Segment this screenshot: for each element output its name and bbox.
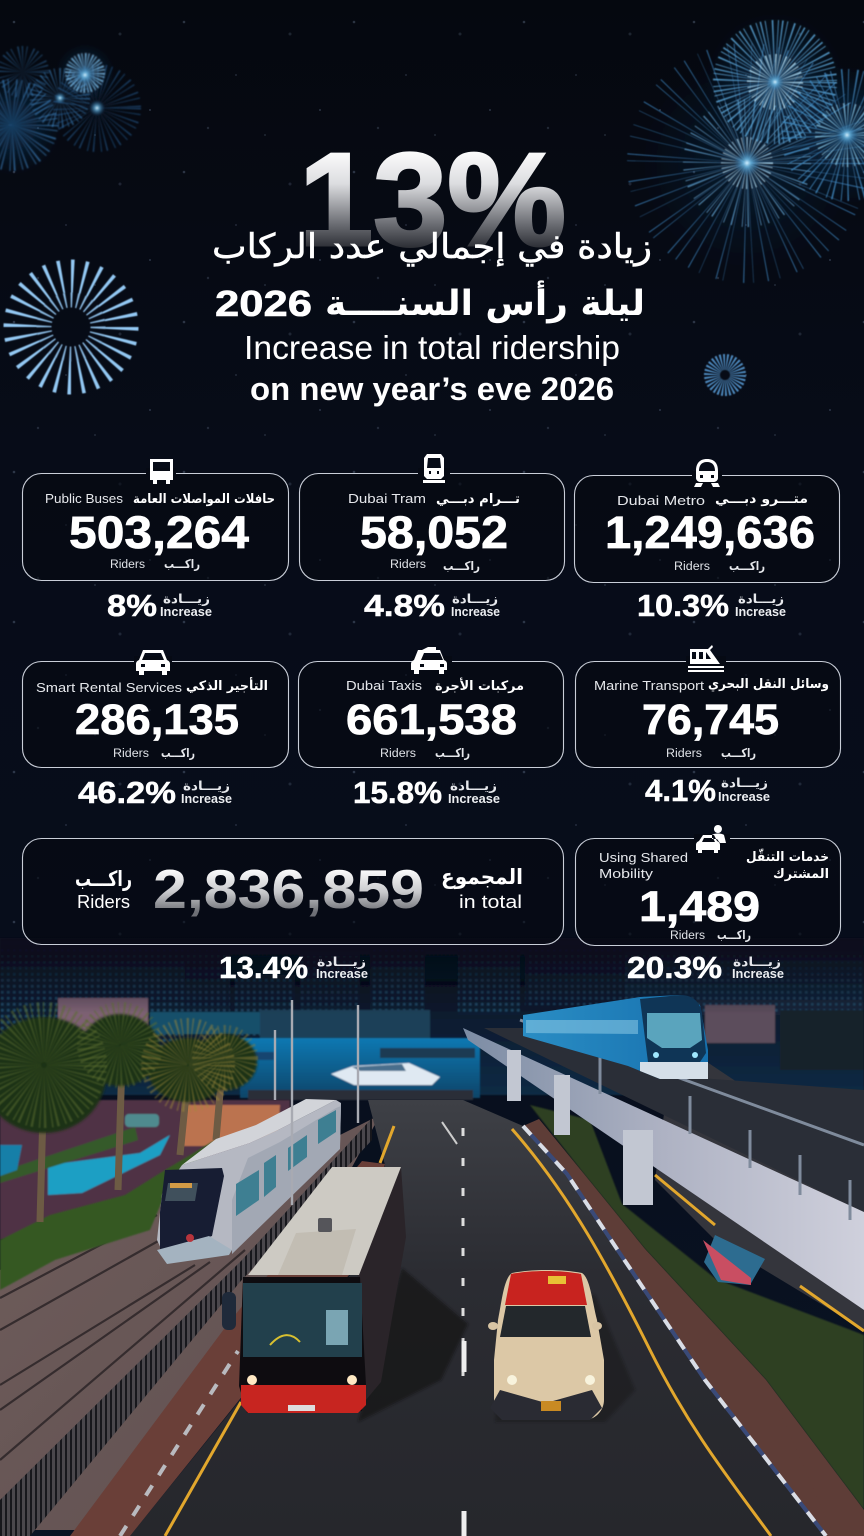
stat: smart rental increase: زيـــادة (183, 778, 230, 793)
panel: shared mobility (576, 825, 840, 946)
icon: bus (146, 459, 176, 484)
stat: marine increase (645, 773, 770, 808)
value: 286,135 (75, 696, 239, 744)
value: 503,264 (69, 507, 249, 558)
stat: taxis increase (353, 775, 500, 810)
label: Public Buses (45, 491, 124, 506)
panel: smart rental (22, 650, 288, 768)
label: Dubai Tram (348, 491, 426, 506)
riders: Riders (666, 748, 702, 760)
headline Arabic line 2: 2026 (215, 283, 312, 324)
panel: public buses: راكـــب (164, 557, 200, 571)
panel: dubai taxis: مركبات الأجرة (435, 677, 524, 694)
stat: total increase (219, 950, 368, 985)
stat: shared increase: Increase (732, 967, 784, 981)
panel: marine transport (576, 645, 840, 768)
stat: total increase: Increase (316, 967, 368, 981)
stat: buses increase (107, 588, 212, 623)
riders: Riders (390, 559, 426, 571)
label: Marine Transport (594, 678, 704, 693)
stat: total increase: 13.4% (219, 950, 308, 985)
panel: shared mobility: راكـــب (717, 928, 751, 942)
fence (0, 1118, 372, 1536)
panel: total (22, 838, 564, 944)
panel: smart rental: التأجير الذكي (186, 677, 268, 694)
stat: marine increase: Increase (718, 790, 770, 804)
headline English: Increase in total ridership (244, 329, 620, 366)
stat: smart rental increase: 46.2% (78, 775, 176, 810)
fireworks top left (0, 43, 119, 175)
panel: marine transport: وسائل النقل البحري (708, 677, 829, 692)
stat: metro increase: 10.3% (637, 588, 729, 623)
riders label: راكـــب (75, 867, 132, 891)
tram ground and tracks (0, 1115, 380, 1530)
riders: Riders (380, 748, 416, 760)
label: Dubai Taxis (346, 678, 423, 693)
panel: public buses (22, 459, 288, 580)
value: 1,249,636 (605, 507, 815, 558)
panel: dubai taxis (298, 647, 564, 768)
riders: Riders (113, 748, 149, 760)
panel: shared mobility: Mobility (599, 866, 654, 881)
stat: tram increase (364, 588, 500, 623)
stat: shared increase (627, 950, 784, 985)
headline English: on new year’s eve 2026 (250, 371, 614, 407)
brick sidewalk and kerb (70, 1161, 385, 1536)
label: Dubai Metro (617, 493, 705, 508)
riders: Riders (110, 559, 145, 571)
metro train (523, 995, 708, 1079)
icon: boat (686, 645, 726, 672)
stat: shared increase: 20.3% (627, 950, 722, 985)
panel: dubai metro: متـــرو دبـــي (715, 492, 808, 507)
stat: tram increase: Increase (451, 605, 500, 619)
panel: shared mobility: المشترك (773, 867, 829, 882)
riders: Riders (670, 930, 705, 942)
city skyline (0, 938, 864, 1095)
water and boat (232, 1038, 480, 1100)
stat: smart rental increase (78, 775, 232, 810)
stat: buses increase: زيـــادة (163, 591, 210, 606)
stat: smart rental increase: Increase (181, 792, 232, 806)
panel: dubai metro (574, 459, 840, 582)
headline Arabic line 1: زيادة في إجمالي عدد الركاب (212, 227, 652, 267)
panel: dubai tram: تـــرام دبـــي (436, 492, 520, 507)
stat: marine increase: زيـــادة (721, 775, 768, 790)
stat: buses increase: Increase (160, 605, 212, 619)
firework ring left (20, 276, 122, 378)
panel: public buses: حافلات المواصلات العامة (133, 492, 275, 507)
fireworks top right (637, 12, 864, 273)
value: 76,745 (642, 696, 779, 744)
stat: marine increase: 4.1% (645, 773, 716, 808)
stat: metro increase (637, 588, 786, 623)
value: 1,489 (639, 883, 760, 931)
icon: shared car (694, 825, 730, 853)
riders: Riders (674, 561, 710, 573)
stat: shared increase: زيـــادة (733, 954, 781, 969)
stat: taxis increase: 15.8% (353, 775, 442, 810)
left promenade (0, 1100, 290, 1240)
headline Arabic line 2: ليلة رأس السنــــة (325, 280, 645, 324)
label arabic: خدمات التنقّل (746, 848, 829, 865)
headline Arabic line 2 (215, 280, 645, 324)
icon: metro (692, 459, 722, 487)
photo: transport scene (0, 938, 864, 1536)
road (130, 1100, 826, 1536)
panel: total: in total (459, 891, 522, 912)
in total label: المجموع (441, 865, 523, 889)
icon: taxi (411, 647, 452, 674)
stat: tram increase: 4.8% (364, 588, 445, 623)
right verge and bushes (523, 1040, 864, 1536)
stat: metro increase: زيـــادة (738, 591, 784, 606)
total value: 2,836,859 (153, 858, 424, 920)
metro viaduct (463, 1020, 864, 1310)
panel: smart rental: راكـــب (161, 746, 195, 760)
panel: dubai tram (300, 454, 564, 580)
panel: dubai tram: راكـــب (443, 559, 480, 573)
stat: metro increase: Increase (735, 605, 786, 619)
panel: marine transport: راكـــب (721, 746, 756, 760)
value: 661,538 (346, 696, 517, 744)
firework small right (712, 362, 738, 388)
stat: taxis increase: Increase (448, 792, 500, 806)
value: 58,052 (360, 507, 508, 558)
hedges (0, 1140, 220, 1290)
label english: Using Shared (599, 850, 688, 865)
street lamps (275, 1000, 358, 1205)
stat: buses increase: 8% (107, 588, 157, 623)
panel: total: Riders (77, 891, 130, 912)
stat: taxis increase: زيـــادة (450, 778, 497, 793)
label: Smart Rental Services (36, 680, 183, 695)
headline: 13%: 13% (299, 126, 566, 273)
tram (157, 1099, 341, 1264)
panel: dubai taxis: راكـــب (435, 746, 470, 760)
headline English (244, 329, 620, 407)
icon: tram (418, 454, 450, 483)
bus (222, 1167, 468, 1422)
stat: total increase: زيـــادة (317, 954, 366, 969)
panel: dubai metro: راكـــب (729, 559, 765, 573)
stat: tram increase: زيـــادة (452, 591, 498, 606)
taxi (488, 1270, 635, 1422)
icon: car (134, 650, 172, 675)
palm trees (0, 1014, 257, 1222)
